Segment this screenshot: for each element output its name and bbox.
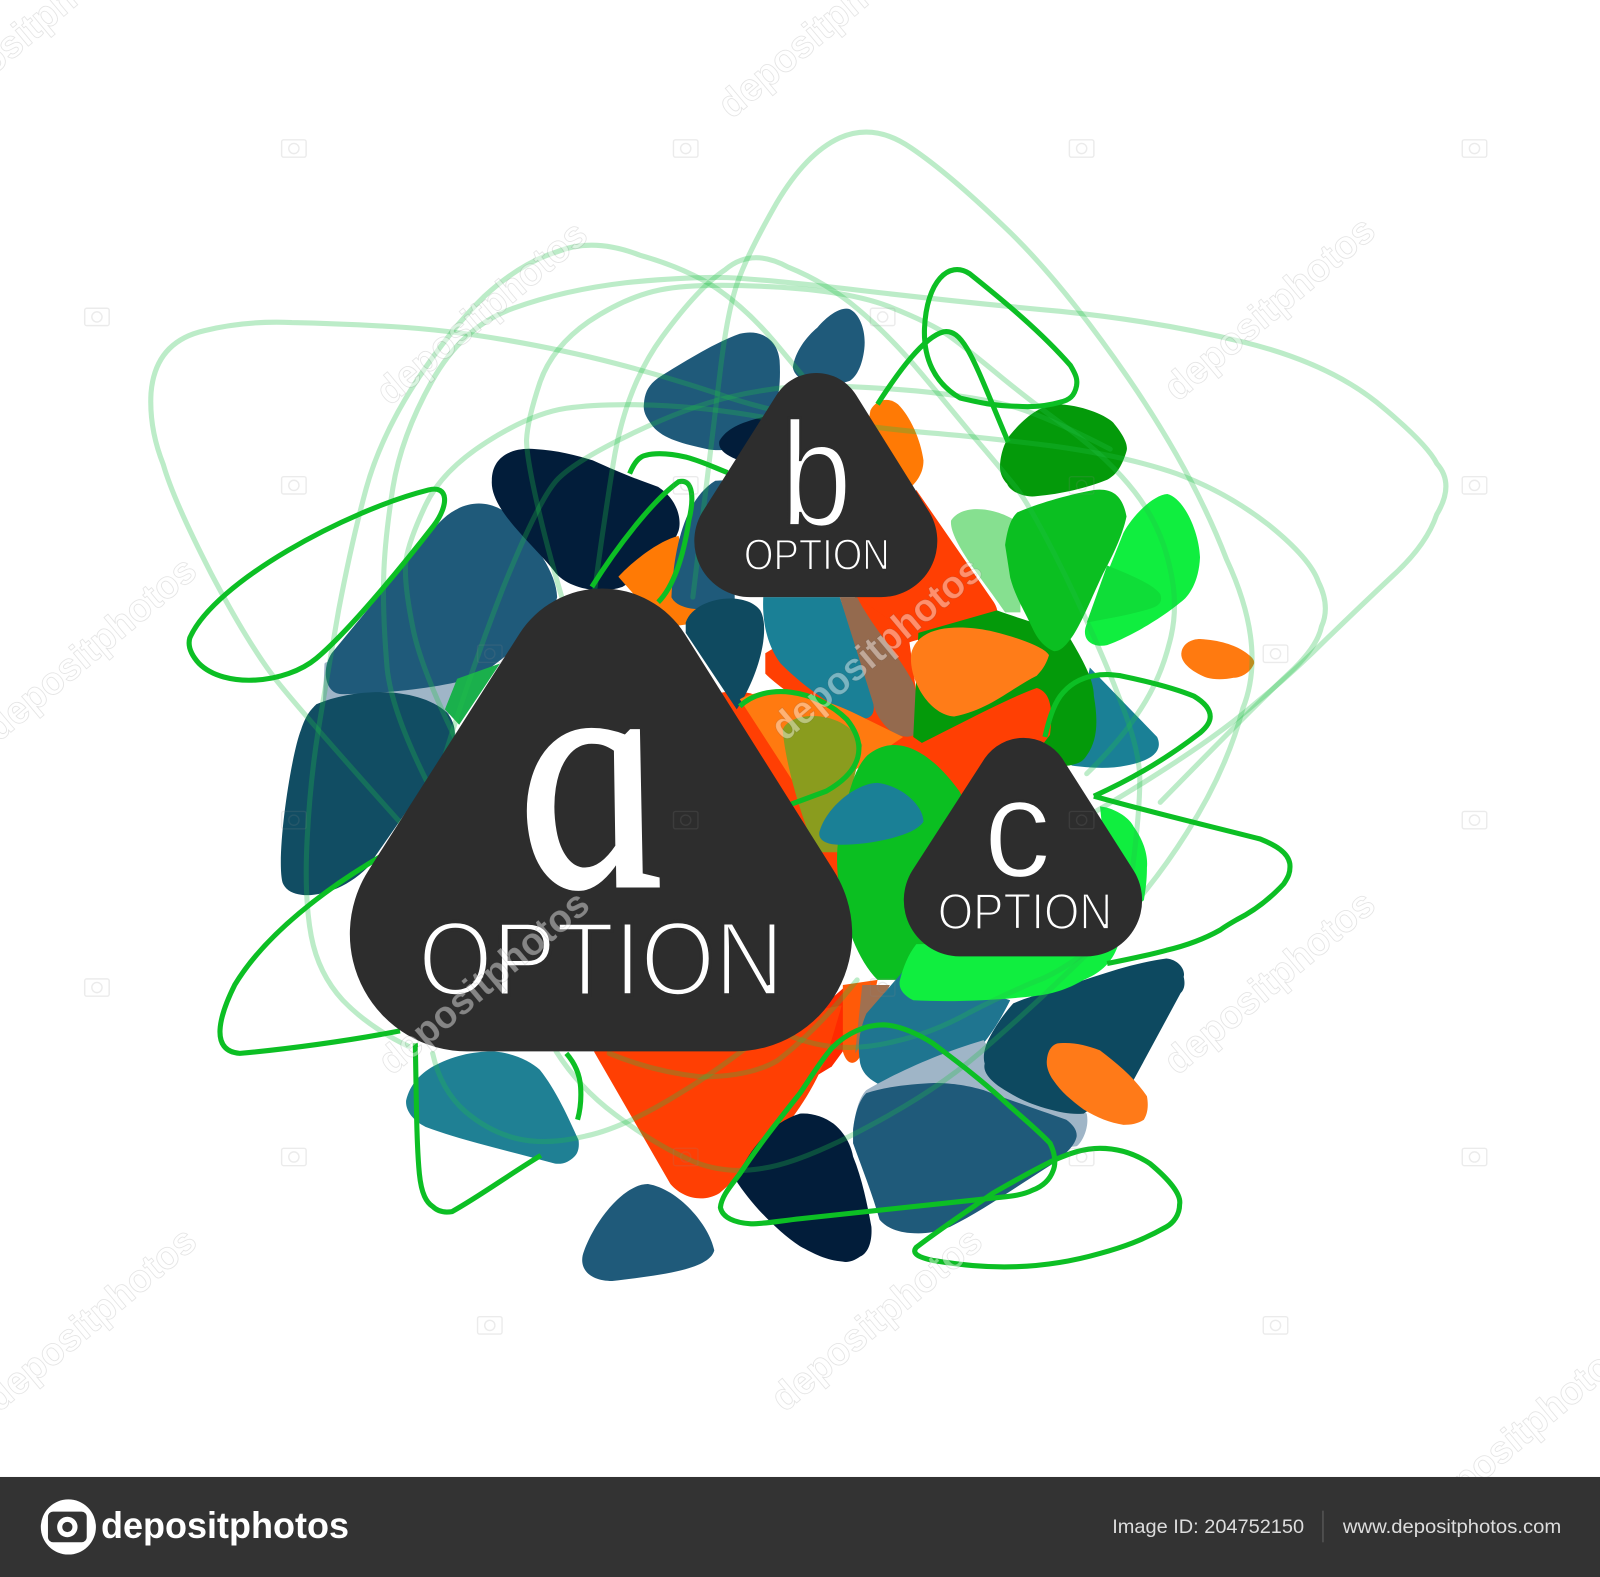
blob: navy (492, 449, 680, 590)
blob: blue bottom (853, 1083, 1077, 1233)
blob: dark green block (913, 610, 1096, 776)
line: crossing diagonal (439, 386, 1110, 776)
watermark text: depositphotos (763, 1219, 991, 1420)
line: arc beneath a (433, 970, 843, 1142)
outline: top right loop (924, 270, 1077, 407)
blob: dark teal under triangle a (686, 599, 764, 709)
website url: www.depositphotos.com (1342, 1516, 1561, 1538)
line: inner lower arc (405, 405, 764, 786)
triangle a (350, 588, 852, 1051)
option c triangle (904, 738, 1142, 956)
blob: big blue (326, 504, 557, 694)
line: central arch (592, 258, 1140, 868)
outline: olive loop (740, 692, 859, 804)
blob: red under b (765, 597, 923, 755)
option a triangle (350, 588, 852, 1051)
bright green outline shapes (189, 270, 1290, 1267)
blob: green wedge (445, 663, 500, 725)
blob: olive (783, 716, 862, 852)
outline: bottom centre loop (720, 1025, 1055, 1224)
blob: navy bottom (736, 1113, 872, 1262)
watermark text: depositphotos (763, 548, 991, 749)
blob: small blue bottom (582, 1184, 714, 1281)
triangle b (694, 373, 937, 597)
letter c: c (984, 750, 1051, 907)
bottom blobs (406, 944, 1184, 1281)
blob: large red diamond (852, 490, 997, 653)
footer bar (0, 1477, 1600, 1577)
outline: loop under a (415, 1043, 581, 1212)
blob: teal under a (406, 1051, 579, 1164)
blob: bright green right of c (1100, 806, 1147, 924)
blob: blue beside b (671, 480, 735, 609)
line: arc through red (609, 980, 857, 1077)
label OPTION: OPTION (938, 883, 1112, 940)
logo wordmark: depositphotos (101, 1505, 349, 1546)
back blobs: blue and dark stones (281, 309, 865, 895)
letter b: b (781, 391, 852, 558)
outline: left lower loop (220, 855, 400, 1053)
pale green scribble lines (151, 132, 1446, 1170)
outline: left upper loop (189, 489, 445, 680)
blob: orange oval lower right (1047, 1043, 1148, 1125)
blob: dark teal left (281, 692, 455, 895)
watermark text: depositphotos (1156, 208, 1383, 409)
centre blobs: red, orange, green cluster (686, 400, 1254, 980)
label OPTION: OPTION (744, 531, 890, 580)
option b triangle (694, 373, 937, 597)
blob: teal under b (763, 597, 874, 719)
line: outer left arc (306, 245, 847, 1046)
line: inner loop to lower right (527, 285, 1174, 774)
outline: right lower loop (1094, 796, 1290, 964)
watermark text: depositphotos (1156, 882, 1383, 1083)
blob: dark teal lower right (984, 958, 1184, 1114)
blob: orange around olive (740, 692, 903, 786)
blob: top left blue (644, 332, 780, 450)
label OPTION: OPTION (418, 901, 784, 1018)
watermark text: depositphotos (368, 213, 596, 413)
blob: pale rim (322, 657, 459, 714)
outline: bottom right loop (915, 1148, 1180, 1267)
triangle c (904, 738, 1142, 956)
outline: hook near navy blob (592, 481, 692, 602)
blob: orange sliver (843, 980, 878, 1063)
blob: brown sliver (855, 985, 890, 1053)
blob: green pick (1005, 490, 1127, 651)
line: lower right arc (755, 924, 1122, 1047)
blob: red slivers (806, 985, 847, 1082)
outline: hook top (630, 454, 728, 474)
blob: red right (907, 688, 1051, 827)
blob: orange behind triangle a (618, 536, 699, 628)
icon: camera logo (41, 1499, 96, 1555)
blob: top blue (793, 309, 865, 385)
image id: Image ID: 204752150 (1112, 1516, 1304, 1538)
blob: pale rim lower (853, 1040, 1087, 1164)
blob: dark green oval (1000, 404, 1127, 496)
blob: mid red column (714, 691, 847, 878)
blob: small orange oval (1181, 639, 1254, 679)
blob: small navy under b (719, 416, 765, 467)
watermark text: depositphotos (370, 882, 598, 1083)
blob: green centre (837, 745, 980, 980)
line: wide left loop (151, 322, 1325, 837)
blob: orange right of b (867, 400, 923, 487)
blob: teal oval (819, 783, 923, 845)
watermark camera icons (85, 140, 1487, 1334)
blob: red bottom triangle (594, 1005, 842, 1198)
line: top loop (556, 132, 1252, 1170)
outline: triangle lines above b (878, 332, 1008, 442)
letter a: a (478, 590, 690, 959)
blob: bright green bottom (900, 944, 1118, 1001)
blob: bright green petal (1085, 494, 1200, 646)
blob: teal right (1071, 668, 1159, 768)
blob: orange pebble (911, 628, 1049, 717)
outline: right upper loop (1045, 675, 1210, 796)
blob: light green (951, 509, 1020, 612)
line: big right loop (383, 277, 1446, 817)
blob: brown stripe (840, 597, 920, 737)
blob: teal lower (859, 967, 1010, 1087)
blob: mid green overlap (1087, 565, 1161, 623)
